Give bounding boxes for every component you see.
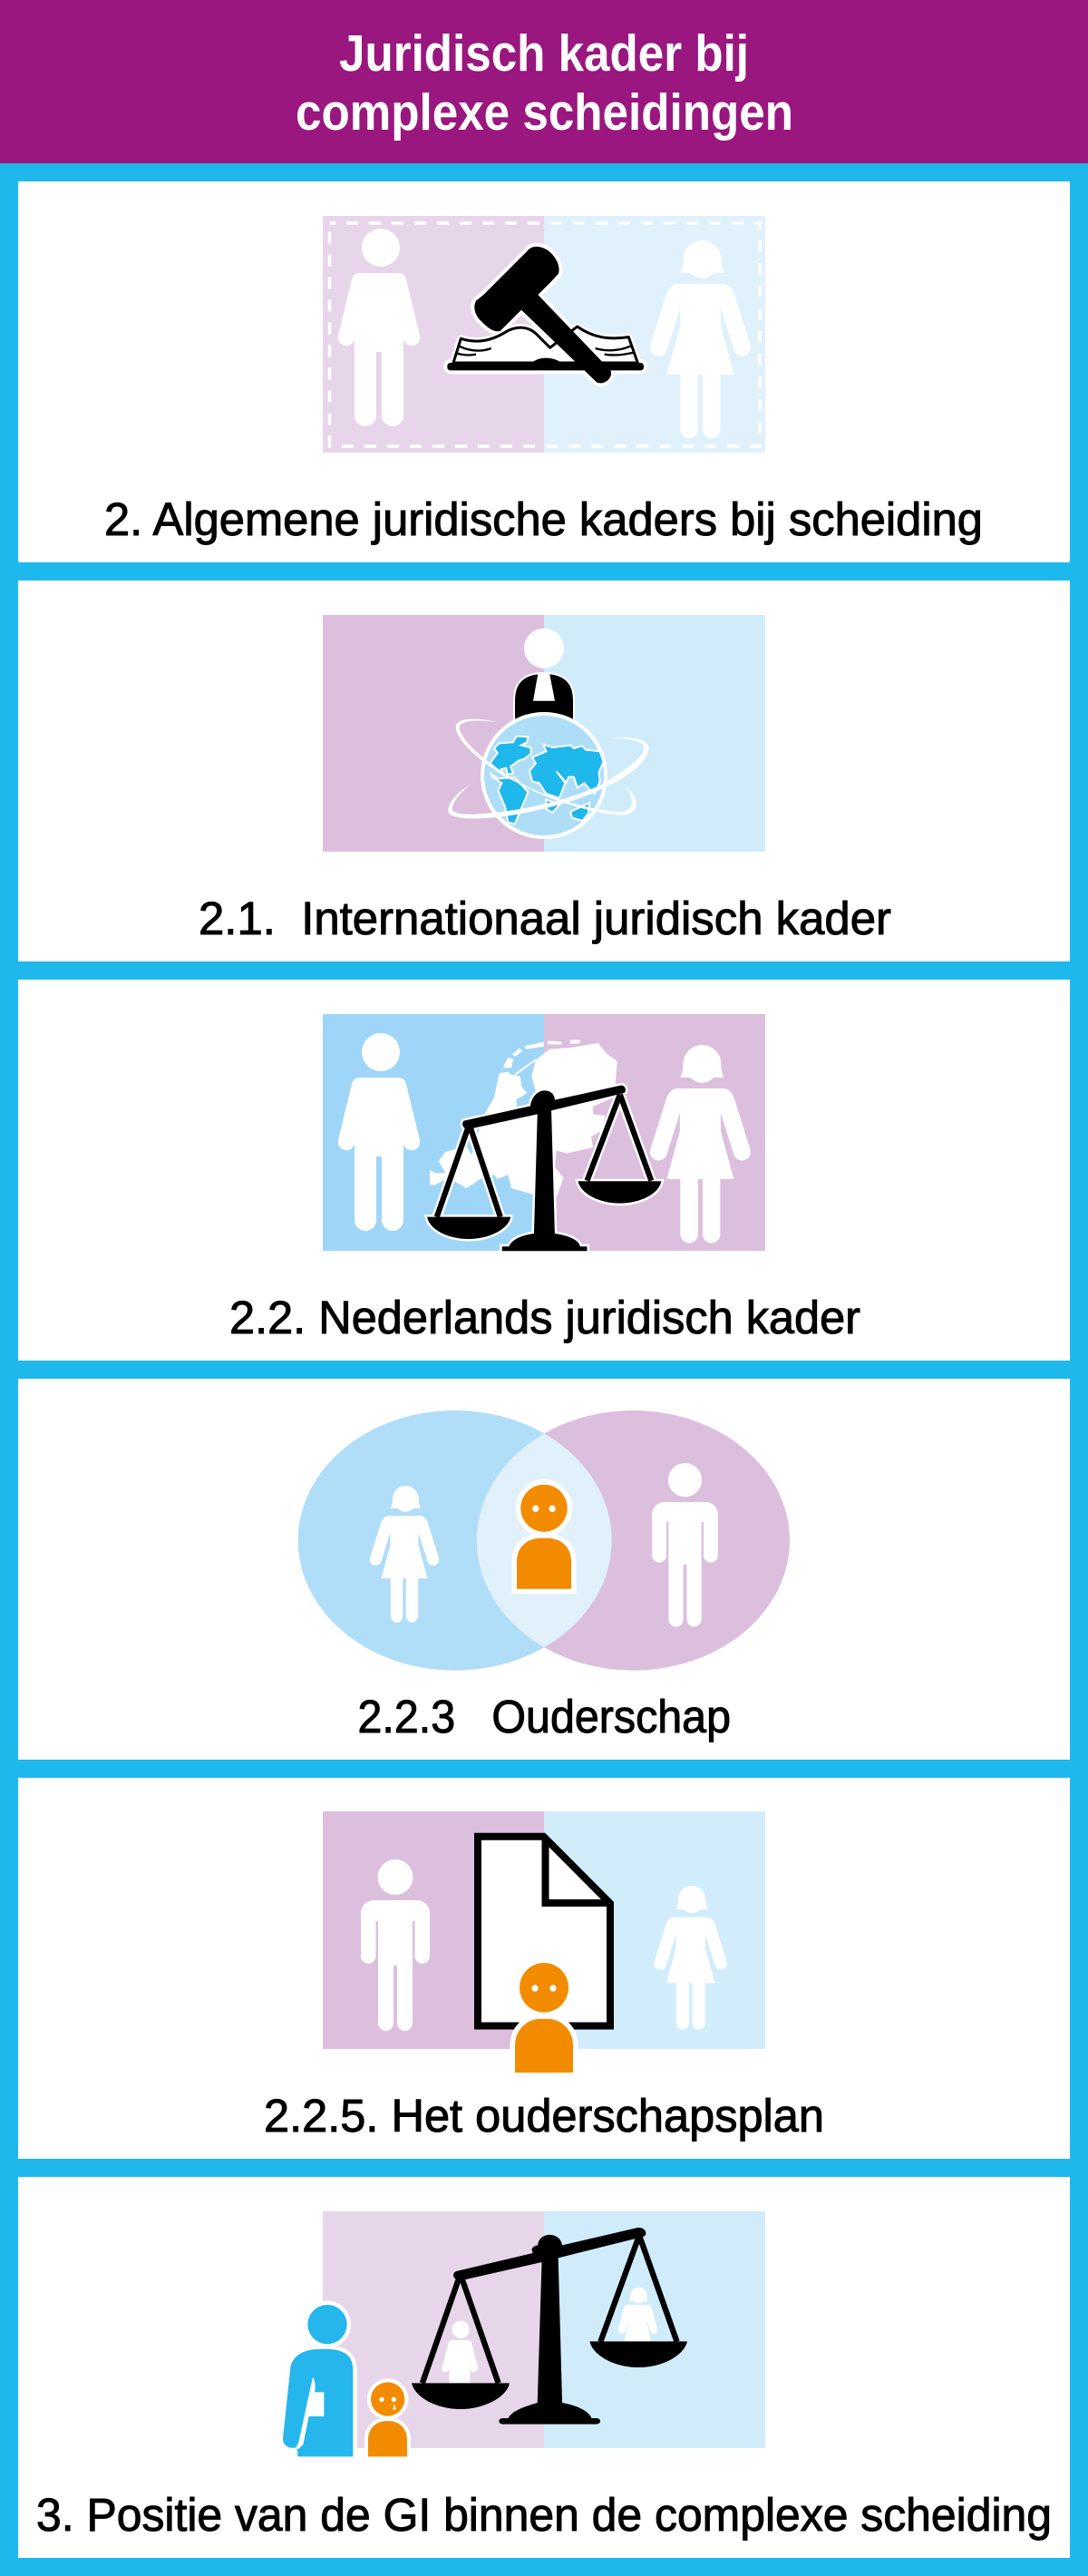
icon: guardian figure [283,2305,353,2456]
caption: 3. Positie van de GI binnen de complexe scheiding [36,2489,1052,2541]
caption: 2.2. Nederlands juridisch kader [229,1292,860,1343]
title banner: Juridisch kader bij [339,24,749,83]
venn diagram [298,1410,790,1671]
panel: algemene juridische kaders [18,181,1070,562]
icon: child [517,1485,571,1589]
icon: child [515,1963,573,2073]
caption: 2.2.5. Het ouderschapsplan [264,2090,824,2142]
title banner [0,0,1088,163]
caption: 2.1. Internationaal juridisch kader [199,893,891,944]
panel: ouderschapsplan [18,1778,1070,2159]
icon: map of the Netherlands [430,1040,617,1197]
icon: gavel on book [447,247,644,383]
caption: 2. Algemene juridische kaders bij scheiding [104,493,983,545]
icon: crying child [368,2382,407,2456]
caption: 2.2.3 Ouderschap [357,1691,731,1742]
icon: man [338,1033,420,1231]
title banner: complexe scheidingen [296,83,793,141]
panel: positie van de GI [18,2177,1070,2558]
icon: man [338,229,420,426]
icon: globe with orbits [448,714,648,837]
icon: judge [514,629,574,726]
icon: woman [370,1486,439,1623]
panel: ouderschap [18,1379,1070,1760]
panel: nederlands juridisch kader [18,980,1070,1361]
icon: scales with parents [412,2228,687,2425]
panel: internationaal juridisch kader [18,581,1070,961]
icon: man [652,1463,718,1626]
icon: woman [650,1045,751,1244]
icon: woman [650,240,751,439]
icon: document [478,1837,610,2026]
icon: scales [427,1086,661,1251]
icon: man [361,1859,430,2031]
icon: woman [654,1886,727,2029]
